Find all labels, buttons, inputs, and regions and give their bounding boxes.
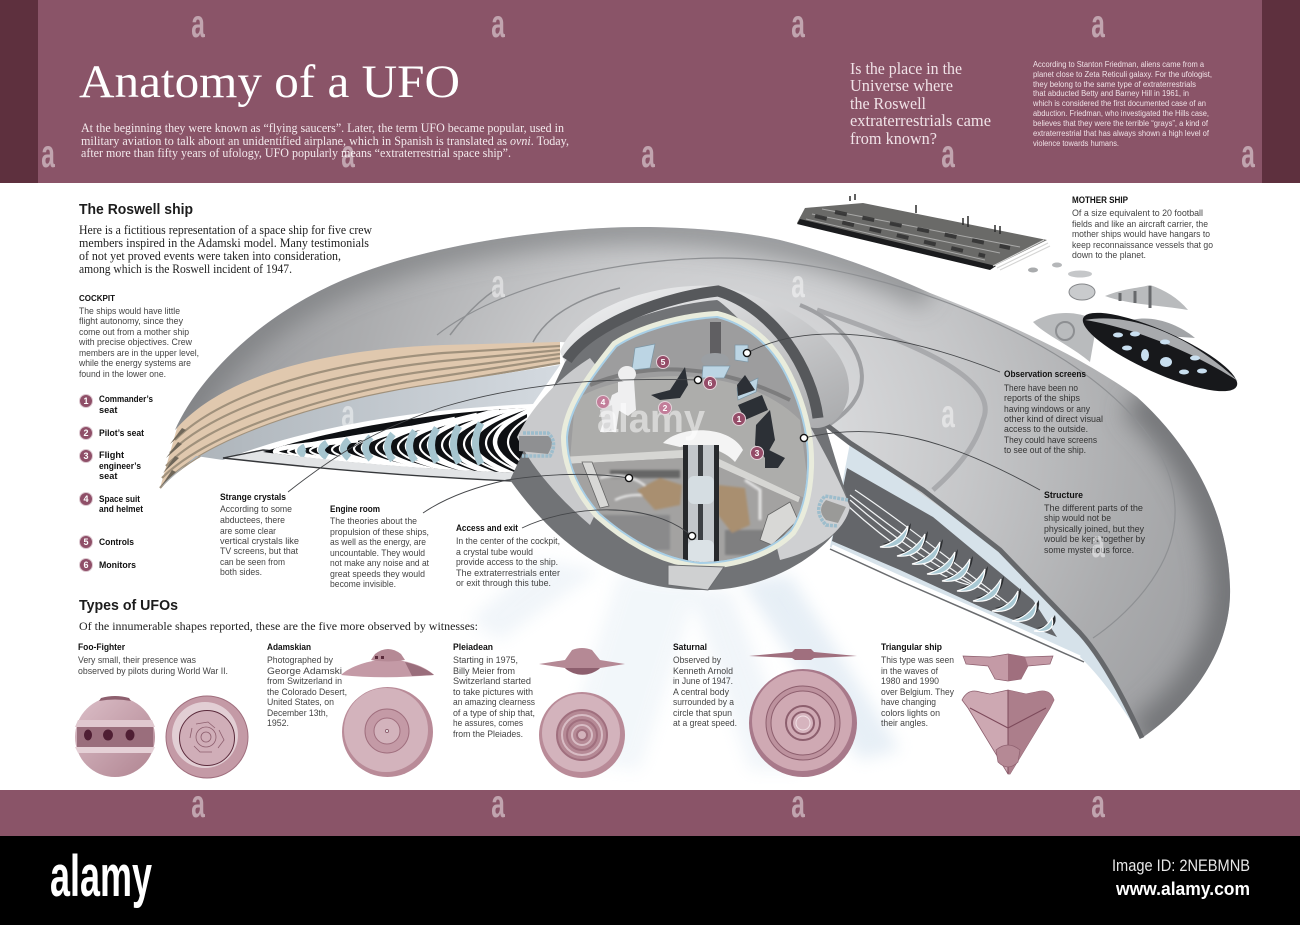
callout: Strange crystals: TV screens, but that <box>220 546 298 556</box>
UFO type: Adamskian: Adamskian <box>267 642 311 652</box>
cockpit wall rings <box>568 318 807 562</box>
mother ship illustration <box>797 194 1050 270</box>
image id: Image ID: 2NEBMNB <box>1112 856 1250 875</box>
header side note: According to Stanton Friedman, aliens came from a <box>1033 60 1205 69</box>
cockpit legend: and helmet <box>99 504 143 514</box>
UFO type: Pleiadean: from the Pleiades. <box>453 729 523 739</box>
UFO type: Foo-Fighter: observed by pilots during World War II. <box>78 666 228 676</box>
UFO type: Pleiadean: to take pictures with <box>453 687 533 697</box>
upper level floor <box>570 376 810 500</box>
dark lower hull <box>510 288 850 590</box>
repeating watermark: a <box>41 131 55 175</box>
UFO type: Triangular ship: Triangular ship <box>881 642 942 652</box>
callout: Engine room: uncountable. They would <box>330 548 425 558</box>
callout: Engine room: great speeds they would <box>330 569 425 579</box>
central alamy watermark: alamy <box>597 397 706 441</box>
UFO type: Pleiadean: Billy Meier from <box>453 666 515 676</box>
left flange <box>517 358 640 525</box>
callout: Observation screens: having windows or any <box>1004 404 1090 414</box>
header introduction: military aviation to talk about an unidentified airplane, which in Spanish is translated as ovni. Today, <box>81 134 569 148</box>
callout: Observation screens: Observation screens <box>1004 369 1086 379</box>
small reconnaissance vessels <box>1028 262 1188 310</box>
header question: Is the place in the <box>850 59 962 78</box>
UFO type: Saturnal <box>673 642 857 777</box>
UFO type: Pleiadean: Switzerland started <box>453 676 531 686</box>
Roswell introduction text: among which is the Roswell incident of 1947. <box>79 262 292 276</box>
repeating watermark: a <box>641 131 655 175</box>
UFO type: Triangular ship: in the waves of <box>881 666 938 676</box>
UFO type: Adamskian: December 13th, <box>267 708 328 718</box>
callout: Engine room: as well as the energy, are <box>330 537 426 547</box>
UFO type: Triangular ship: colors lights on <box>881 708 940 718</box>
UFO type: Saturnal: at a great speed. <box>673 718 737 728</box>
cockpit text: found in the lower one. <box>79 369 166 379</box>
callout: Observation screens: access to the outside. <box>1004 424 1088 434</box>
left bolt slot <box>519 433 554 456</box>
callout: Strange crystals: are some clear <box>220 526 276 536</box>
UFO type: Foo-Fighter <box>75 642 248 778</box>
cockpit legend: 1 <box>83 396 89 406</box>
UFO type: Saturnal: surrounded by a <box>673 697 735 707</box>
cockpit text: The ships would have little <box>79 306 180 316</box>
cockpit number badges <box>596 356 764 460</box>
repeating watermark: a <box>791 1 805 45</box>
UFO type: Saturnal: in June of 1947. <box>673 676 733 686</box>
shell rim shading <box>175 227 1230 738</box>
cockpit text: COCKPIT <box>79 293 116 303</box>
repeating watermark: a <box>941 391 955 435</box>
stock url: www.alamy.com <box>1115 879 1250 899</box>
header side note <box>1032 60 1212 148</box>
callout: Access and exit: Access and exit <box>456 523 518 533</box>
UFO type: Triangular ship: over Belgium. They <box>881 687 954 697</box>
stock logo: alamy <box>50 844 152 909</box>
repeating watermark: a <box>491 261 505 305</box>
footer colour band <box>0 790 1300 836</box>
callout: Observation screens: They could have screens <box>1004 435 1097 445</box>
cockpit interior <box>568 318 808 562</box>
UFO type: Pleiadean: he assures, comes <box>453 718 523 728</box>
cockpit number badges: 4 <box>601 397 606 407</box>
UFO type: Adamskian: the Colorado Desert, <box>267 687 347 697</box>
large saucer with lights <box>1033 299 1245 405</box>
callout: Observation screens: to see out of the ship. <box>1004 445 1086 455</box>
UFO type: Adamskian: United States, on <box>267 697 334 707</box>
cockpit legend: 5 <box>83 537 89 547</box>
callout: Observation screens: There have been no <box>1004 383 1078 393</box>
callout: Strange crystals: Strange crystals <box>220 492 286 502</box>
header side note: violence towards humans. <box>1033 139 1119 148</box>
UFO type: Adamskian: 1952. <box>267 718 289 728</box>
ladders <box>582 462 798 545</box>
UFO type: Pleiadean: an amazing clearness <box>453 697 535 707</box>
left crystal bank <box>263 408 527 472</box>
callout: Strange crystals: can be seen from <box>220 557 285 567</box>
black credit bar <box>0 836 1300 925</box>
cockpit legend: 6 <box>83 560 89 570</box>
header side note: they belong to the same type of extraterrestrials <box>1033 80 1196 89</box>
callout: Engine room: propulsion of these ships, <box>330 527 429 537</box>
cockpit legend: 3 <box>83 451 89 461</box>
callout: Mother ship <box>1072 195 1213 260</box>
UFO type: Triangular ship: This type was seen <box>881 655 954 665</box>
callout: Strange crystals <box>220 492 299 577</box>
right crystals <box>883 523 1056 628</box>
cockpit number badges: 2 <box>663 403 668 413</box>
repeating watermark: a <box>1091 781 1105 825</box>
callout: Structure: would be kept together by <box>1043 534 1145 544</box>
header question <box>850 59 991 148</box>
heading: Types of UFOs: Types of UFOs <box>79 598 178 614</box>
right lower plates and crystal bank <box>807 410 1142 738</box>
right bolt slot <box>819 496 848 526</box>
callout: Mother ship: keep reconnaissance vessels that go <box>1072 240 1213 250</box>
outer saucer shell <box>175 227 1230 738</box>
UFO type: Adamskian: Photographed by <box>267 655 333 665</box>
header side note: believes that they were the terrible “grays”, a kind of <box>1033 119 1209 128</box>
cockpit legend: 2 <box>83 428 89 438</box>
callout: Observation screens: other kind of direct visual <box>1004 414 1103 424</box>
callout: Structure: some mysterious force. <box>1044 545 1134 555</box>
left lower strip <box>223 450 535 482</box>
header band <box>0 0 1300 183</box>
title: Anatomy of a UFO <box>79 56 460 108</box>
callout: Engine room: not make any noise and at <box>330 558 429 568</box>
header side note: which is considered the first documented case of an <box>1032 99 1206 108</box>
callout: Structure: Structure <box>1044 490 1083 500</box>
types subtitle: Of the innumerable shapes reported, these are the five more observed by witnesses: <box>79 619 478 633</box>
UFO type: Pleiadean: of a type of ship that, <box>453 708 535 718</box>
main ship cross-section <box>160 227 1230 738</box>
cockpit legend: Monitors <box>99 560 136 570</box>
UFO type: Triangular ship: 1980 and 1990 <box>881 676 939 686</box>
UFO type: Saturnal: circle that spun <box>673 708 732 718</box>
header question: from known? <box>850 129 937 148</box>
repeating watermark: a <box>1091 521 1105 565</box>
header side note: abduction. Friedman, who investigated the Hills case, <box>1033 109 1209 118</box>
callout: Mother ship: MOTHER SHIP <box>1072 195 1128 205</box>
screens <box>632 344 758 400</box>
header side note: planet close to Zeta Reticuli galaxy. For the ufologist, <box>1033 70 1212 79</box>
UFO type: Saturnal: Observed by <box>673 655 721 665</box>
access tube <box>663 430 743 573</box>
Roswell introduction text: Here is a fictitious representation of a space ship for five crew <box>79 223 372 237</box>
UFO type: Foo-Fighter: Very small, their presence was <box>78 655 196 665</box>
callout: Engine room: become invisible. <box>330 579 396 589</box>
repeating watermark: a <box>941 131 955 175</box>
callout: Mother ship: Of a size equivalent to 20 football <box>1072 208 1203 218</box>
UFO type: Foo-Fighter: Foo-Fighter <box>78 642 125 652</box>
UFO type: Adamskian <box>267 642 434 777</box>
leader lines and dots <box>288 334 1040 540</box>
cockpit legend: Flight <box>99 450 124 460</box>
callout: Engine room <box>330 504 429 589</box>
header side note: that abducted Betty and Barney Hill in 1961, in <box>1033 89 1189 98</box>
cockpit legend: Controls <box>99 537 134 547</box>
UFO type: Adamskian: George Adamski <box>267 666 342 676</box>
UFO type: Saturnal: Kenneth Arnold <box>673 666 733 676</box>
callout: Strange crystals: both sides. <box>220 567 262 577</box>
heading: The Roswell ship: The Roswell ship <box>79 202 193 218</box>
UFO type: Saturnal: Saturnal <box>673 642 707 652</box>
callout: Access and exit <box>456 523 560 588</box>
cockpit legend: seat <box>99 405 117 415</box>
UFO type: Triangular ship <box>881 642 1054 774</box>
right flange <box>760 413 850 560</box>
cockpit legend: seat <box>99 471 117 481</box>
cockpit text <box>78 293 199 379</box>
UFO type: Triangular ship: have changing <box>881 697 936 707</box>
seats <box>651 367 785 468</box>
repeating watermark: a <box>341 131 355 175</box>
cockpit text: while the energy systems are <box>78 358 191 368</box>
header introduction: At the beginning they were known as “flying saucers”. Later, the term UFO became popular, used in <box>81 121 565 135</box>
space suit <box>600 366 636 432</box>
UFO type: Pleiadean <box>453 642 625 778</box>
cockpit legend: Commander’s <box>99 394 153 404</box>
tube base <box>668 565 724 590</box>
callout: Structure: physically joined, but they <box>1044 524 1144 534</box>
callout: Mother ship: mother ships would have hangars to <box>1072 229 1210 239</box>
cockpit number badges: 5 <box>661 357 666 367</box>
repeating watermark: a <box>191 1 205 45</box>
left gray plate <box>160 365 560 488</box>
callout: Access and exit: In the center of the cockpit, <box>456 536 560 546</box>
header introduction <box>81 121 569 160</box>
Roswell introduction text: of not yet proved events were taken into consideration, <box>79 249 341 263</box>
header question: extraterrestrials came <box>850 111 991 130</box>
cockpit legend: Space suit <box>99 494 140 504</box>
cockpit number badges: 1 <box>737 414 742 424</box>
callout: Engine room: The theories about the <box>330 516 417 526</box>
lower engine room <box>572 458 800 562</box>
UFO type: Adamskian: from Switzerland in <box>267 676 342 686</box>
cockpit legend: Pilot’s seat <box>99 428 144 438</box>
repeating watermark: a <box>491 781 505 825</box>
cockpit legend: 4 <box>83 494 89 504</box>
callout: Engine room: Engine room <box>330 504 380 514</box>
callout: Mother ship: fields and like an aircraft carrier, the <box>1072 219 1208 229</box>
Roswell introduction text: members inspired in the Adamski model. Many testimonials <box>79 236 369 250</box>
repeating watermark: a <box>1091 1 1105 45</box>
repeating watermark: a <box>191 781 205 825</box>
cockpit text: flight autonomy, since they <box>79 316 183 326</box>
repeating watermark: a <box>341 391 355 435</box>
cockpit number badges: 6 <box>708 378 713 388</box>
Roswell introduction text <box>79 223 372 276</box>
callout: Mother ship: down to the planet. <box>1072 250 1146 260</box>
callout: Structure: The different parts of the <box>1044 503 1143 513</box>
cockpit number badges: 3 <box>755 448 760 458</box>
callout: Structure: ship would not be <box>1044 513 1111 523</box>
callout: Structure <box>1043 490 1145 555</box>
cockpit text: with precise objectives. Crew <box>78 337 192 347</box>
header question: Universe where <box>850 76 953 95</box>
repeating watermark: a <box>791 261 805 305</box>
callout: Access and exit: The extraterrestrials enter <box>456 568 560 578</box>
cockpit text: come out from a mother ship <box>79 327 189 337</box>
light beams under the ship <box>470 560 900 770</box>
UFO type: Pleiadean: Starting in 1975, <box>453 655 518 665</box>
left tan layered plating <box>160 342 560 488</box>
callout: Observation screens <box>1004 369 1103 455</box>
UFO type: Triangular ship: their angles. <box>881 718 928 728</box>
ceiling column <box>710 322 721 354</box>
callout: Strange crystals: vertical crystals like <box>220 536 299 546</box>
UFO type: Pleiadean: Pleiadean <box>453 642 493 652</box>
cockpit legend <box>80 394 153 572</box>
callout: Access and exit: provide access to the ship. <box>456 557 558 567</box>
cockpit legend: engineer’s <box>99 461 141 471</box>
cockpit text: members are in the upper level, <box>79 348 199 358</box>
header question: the Roswell <box>850 94 926 113</box>
repeating watermark: a <box>1241 131 1255 175</box>
callout: Strange crystals: According to some <box>220 504 292 514</box>
callout: Access and exit: a crystal tube would <box>456 547 533 557</box>
header side note: extraterrestrial that has always shown a high level of <box>1033 129 1210 138</box>
repeating watermark: a <box>491 1 505 45</box>
upper dome <box>560 286 849 428</box>
shell rings <box>437 258 1175 638</box>
callout: Observation screens: reports of the ships <box>1004 393 1080 403</box>
header introduction: after more than fifty years of ufology, UFO popularly means “extraterrestrial space ship”. <box>81 146 511 160</box>
callout: Access and exit: or exit through this tube. <box>456 578 551 588</box>
repeating watermark: a <box>791 781 805 825</box>
UFO type: Saturnal: A central body <box>673 687 729 697</box>
callout: Strange crystals: abductees, there <box>220 515 285 525</box>
